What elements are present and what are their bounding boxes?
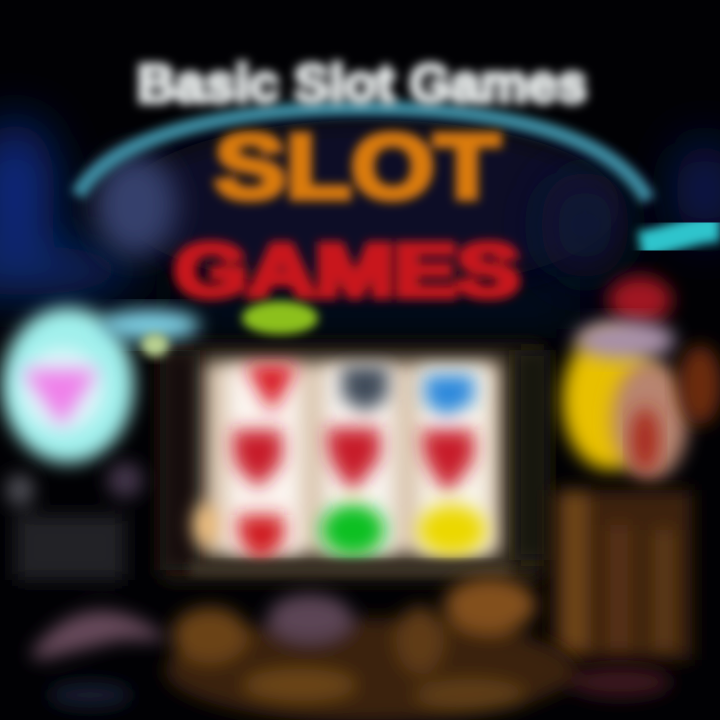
background glow: blue lights	[0, 120, 720, 316]
reels background	[205, 362, 500, 554]
heading: SLOT: SLOT	[214, 116, 500, 218]
machine frame	[160, 345, 545, 580]
green badge	[242, 301, 318, 335]
teal ribbon right	[640, 228, 720, 245]
slot machine	[160, 345, 550, 580]
machine bottom	[190, 562, 510, 576]
title: Basic Slot Games: Basic Slot Games	[137, 54, 587, 114]
gold coins and towers right	[552, 490, 692, 660]
reel symbols	[232, 365, 486, 562]
wheel and character right	[562, 276, 720, 480]
oval marquee	[78, 108, 648, 290]
heading: GAMES: GAMES	[174, 229, 520, 312]
heart bubble left	[2, 307, 200, 463]
treasure pile bottom	[165, 577, 672, 720]
dark figures lower left	[6, 462, 170, 708]
